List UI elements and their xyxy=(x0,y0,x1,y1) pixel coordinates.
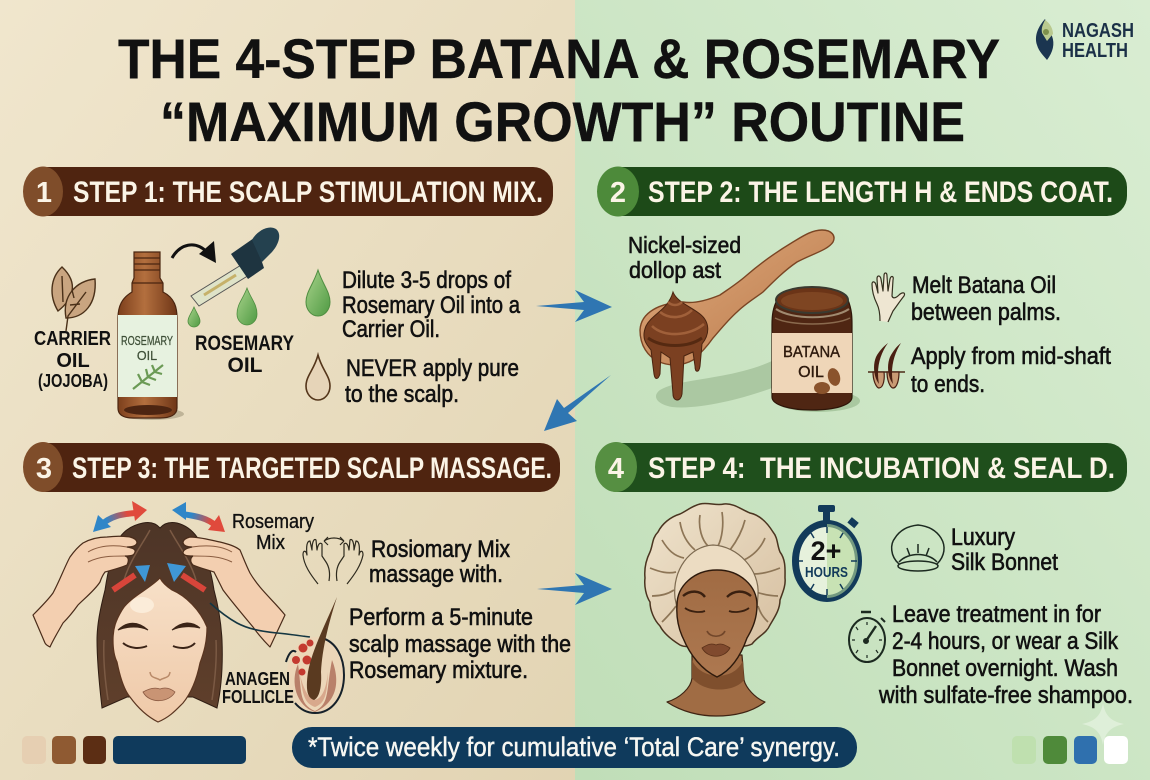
sparkle mark xyxy=(1082,703,1124,745)
title xyxy=(118,27,1000,153)
forehead highlight xyxy=(130,597,154,613)
lips xyxy=(143,688,175,701)
illustration: rosemary oil bottle xyxy=(118,252,184,420)
rosemary mix label xyxy=(232,511,314,554)
illustration: batana oil jar: BATANA xyxy=(783,344,840,361)
text: dilute instruction: Carrier Oil. xyxy=(342,316,440,343)
right hand xyxy=(183,537,285,647)
illustration: shadow under spoon xyxy=(656,361,772,407)
text: luxury silk bonnet: Silk Bonnet xyxy=(951,549,1058,576)
carrier oil label xyxy=(34,328,111,391)
step 4 header bar xyxy=(595,442,1127,492)
icon: 2+ hours stopwatch: HOURS xyxy=(805,565,848,581)
closed eyes xyxy=(123,643,195,648)
icon: 2+ hours stopwatch xyxy=(796,505,859,598)
text: melt batana oil: Melt Batana Oil xyxy=(912,272,1056,299)
icon: hair follicles xyxy=(868,343,905,388)
text: leave treatment: 2-4 hours, or wear a Silk xyxy=(892,628,1119,655)
step 3 header bar xyxy=(23,442,560,492)
text: massage with: massage with. xyxy=(369,561,503,588)
illustration: woman in silk bonnet xyxy=(645,503,785,716)
illustration: dollop highlights xyxy=(652,302,704,334)
text: 5-minute scalp massage xyxy=(349,604,571,684)
text: 5-minute scalp massage: scalp massage with the xyxy=(349,631,571,658)
illustration: wooden spoon xyxy=(640,230,834,365)
step 3 header bar: STEP 3: THE TARGETED SCALP MASSAGE. xyxy=(72,452,552,485)
logo: Nagash Health: NAGASH xyxy=(1062,20,1134,42)
text: never apply pure: to the scalp. xyxy=(345,381,459,408)
arrow: step 2 to step 3 xyxy=(544,375,611,431)
callout line to follicle xyxy=(210,603,310,637)
logo: Nagash Health xyxy=(1036,19,1134,62)
text: nickel-sized dollop: dollop ast xyxy=(629,257,722,283)
bonnet folds xyxy=(650,512,780,622)
swatches: left palette xyxy=(22,736,246,764)
text: luxury silk bonnet: Luxury xyxy=(951,524,1015,551)
icon: green drop xyxy=(306,270,330,316)
icon: carrier oil leaves xyxy=(52,267,95,331)
face xyxy=(677,570,757,677)
illustration: dropper xyxy=(191,227,279,306)
text: 5-minute scalp massage: Rosemary mixture. xyxy=(349,657,528,684)
text: leave treatment xyxy=(878,601,1133,709)
illustration: batana oil jar xyxy=(772,287,860,412)
text: apply from mid-shaft: Apply from mid-shaft xyxy=(911,343,1111,370)
rosemary oil label: ROSEMARY xyxy=(195,332,294,355)
text: leave treatment: Bonnet overnight. Wash xyxy=(892,655,1118,682)
right finger lines xyxy=(192,546,232,562)
anagen follicle label: FOLLICLE xyxy=(222,687,294,707)
icon: 2+ hours stopwatch: 2+ xyxy=(811,536,841,566)
illustration: anagen follicle xyxy=(286,597,344,713)
text: massage with: Rosiomary Mix xyxy=(371,536,510,563)
step 1 header bar xyxy=(23,166,553,216)
panel: step 3 content xyxy=(33,501,571,722)
swatches: right palette xyxy=(1012,736,1128,764)
lips xyxy=(702,644,730,656)
panel: step 1 content xyxy=(34,227,521,420)
text: nickel-sized dollop xyxy=(628,232,741,283)
step 2 header bar: 2 xyxy=(610,177,626,209)
icon: small stopwatch xyxy=(849,612,885,662)
carrier oil label: CARRIER xyxy=(34,328,111,350)
hair xyxy=(97,523,222,708)
step 2 header bar xyxy=(597,166,1127,216)
icon: hand xyxy=(872,273,905,322)
step 1 header bar: 1 xyxy=(36,177,52,209)
logo: Nagash Health: HEALTH xyxy=(1062,40,1128,62)
text: never apply pure xyxy=(345,355,519,408)
nose xyxy=(707,631,725,636)
face xyxy=(113,578,207,722)
neck and shoulders xyxy=(667,655,765,716)
carrier oil label: (JOJOBA) xyxy=(38,371,108,391)
rosemary oil label xyxy=(195,332,294,377)
text: apply from mid-shaft: to ends. xyxy=(911,371,985,398)
text: melt batana oil: between palms. xyxy=(911,299,1061,326)
text: nickel-sized dollop: Nickel-sized xyxy=(628,232,741,258)
footer callout pill: *Twice weekly for cumulative ‘Total Care’ synergy. xyxy=(308,732,840,762)
carrier oil label: OIL xyxy=(56,350,90,372)
icon: small and large rosemary drops xyxy=(188,288,257,327)
brows xyxy=(683,592,751,597)
title: “MAXIMUM GROWTH” ROUTINE xyxy=(160,90,965,153)
title: THE 4-STEP BATANA & ROSEMARY xyxy=(118,27,1000,90)
arrow: step 1 to step 2 xyxy=(536,290,612,322)
eyebrows xyxy=(118,623,200,630)
icon: outline drop xyxy=(306,355,330,400)
left finger lines xyxy=(88,546,127,562)
bonnet band xyxy=(675,545,758,608)
illustration: batana oil jar: OIL xyxy=(798,364,824,381)
icon: silk bonnet xyxy=(892,525,944,571)
text: dilute instruction: Dilute 3-5 drops of xyxy=(342,267,511,294)
anagen follicle label: ANAGEN xyxy=(225,669,290,689)
illustration: rosemary oil bottle: ROSEMARY xyxy=(121,334,173,348)
illustration: batana dollop with drips xyxy=(644,292,708,400)
scalp arrows xyxy=(113,575,135,590)
nose xyxy=(150,672,170,680)
rosemary mix label: Mix xyxy=(256,532,285,554)
icon: massage hands xyxy=(303,537,363,584)
background: beige left half xyxy=(0,0,575,780)
text: leave treatment: Leave treatment in for xyxy=(892,601,1101,628)
text: 5-minute scalp massage: Perform a 5-minute xyxy=(349,604,533,631)
footer callout pill xyxy=(292,727,857,768)
text: melt batana oil xyxy=(911,272,1061,326)
arrow: curved black xyxy=(172,241,216,263)
step 1 header bar: STEP 1: THE SCALP STIMULATION MIX. xyxy=(73,176,543,209)
panel: step 4 content xyxy=(645,503,1133,716)
rosemary mix label: Rosemary xyxy=(232,511,314,533)
step 4 header bar: 4 xyxy=(608,453,624,485)
text: dilute instruction: Rosemary Oil into a xyxy=(342,292,521,319)
neck shadow xyxy=(692,660,744,690)
text: massage with xyxy=(369,536,510,588)
left hand xyxy=(33,536,137,647)
background: green right half xyxy=(575,0,1150,780)
top massage arrows xyxy=(100,513,136,526)
illustration: woman massaging scalp xyxy=(33,501,285,722)
step 3 header bar: 3 xyxy=(36,453,52,485)
arrow: step 3 to step 4 xyxy=(537,573,612,605)
text: apply from mid-shaft xyxy=(911,343,1111,398)
panel: step 2 content xyxy=(628,230,1111,412)
anagen follicle label xyxy=(222,669,294,707)
illustration: rosemary oil bottle: OIL xyxy=(137,349,157,363)
bonnet xyxy=(645,503,785,647)
text: dilute instruction xyxy=(342,267,521,343)
eyes xyxy=(685,608,749,612)
hair strands xyxy=(104,530,216,700)
text: luxury silk bonnet xyxy=(951,524,1058,576)
rosemary oil label: OIL xyxy=(228,354,263,377)
text: never apply pure: NEVER apply pure xyxy=(346,355,519,382)
